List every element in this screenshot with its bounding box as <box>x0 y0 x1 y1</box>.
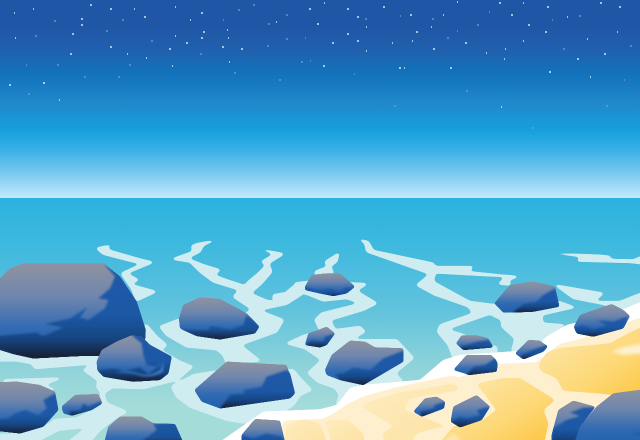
rock: small surf <box>515 340 548 359</box>
rock: beach edge <box>242 419 286 440</box>
rock: mound in the shallows <box>179 297 259 339</box>
rock: shoreline right <box>574 304 630 337</box>
wet sand <box>277 313 640 440</box>
rock: bottom centre left <box>103 417 185 440</box>
sea <box>0 198 640 440</box>
foam on the water, left half <box>0 241 312 440</box>
rock: large centre <box>325 341 403 385</box>
rock: right foreground small <box>552 401 595 440</box>
sky <box>0 0 640 198</box>
rock: front of large boulder <box>97 335 172 382</box>
dry sand patches <box>284 322 640 440</box>
rock: sand pebble <box>413 397 445 417</box>
rock: sand boulder <box>451 395 490 427</box>
rock: angular centre <box>194 362 295 408</box>
rock: bottom left <box>0 382 58 433</box>
white surf line <box>213 297 640 440</box>
rock: right foreground large <box>573 388 640 440</box>
rock: large left boulder <box>0 263 146 358</box>
rock: offshore right <box>494 282 559 313</box>
rock: small pebble left <box>62 394 102 416</box>
stars <box>9 2 632 128</box>
rock: flat near surf <box>456 335 493 350</box>
rock: small centre <box>305 327 335 347</box>
foam on the water, right half <box>359 239 640 358</box>
rock: offshore flat <box>305 273 355 296</box>
foam around the centre rocks <box>273 253 413 405</box>
rock: on the surf line <box>453 355 498 375</box>
